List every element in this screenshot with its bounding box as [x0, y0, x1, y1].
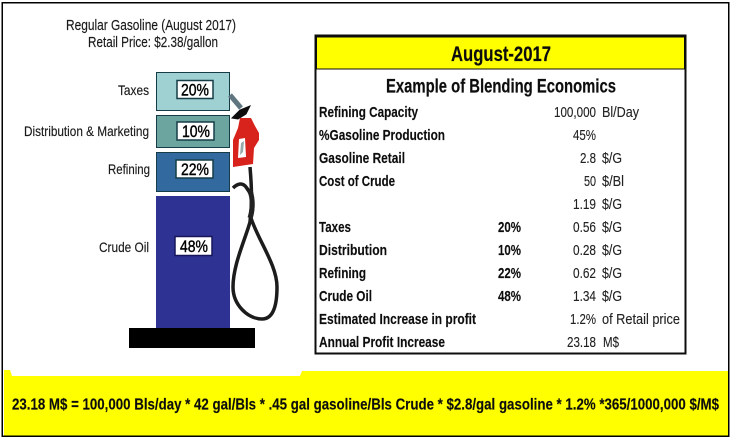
table units: M$ — [603, 334, 620, 351]
table row labels: %Gasoline Production — [319, 127, 445, 144]
segment: distribution and marketing: 10% — [182, 123, 210, 141]
segment: taxes: Taxes — [118, 82, 149, 98]
table values: 1.34 — [573, 288, 596, 305]
table row labels: Refining — [319, 265, 366, 282]
table row labels: Estimated Increase in profit — [319, 311, 476, 328]
table values — [554, 104, 596, 351]
table share percentages: 10% — [498, 242, 521, 259]
table values: 0.62 — [573, 265, 596, 282]
segment: taxes — [118, 72, 230, 110]
table units: $/G — [602, 288, 622, 305]
table header: August-2017 — [451, 43, 551, 66]
table values: 45% — [573, 127, 596, 144]
table units: $/G — [602, 150, 622, 167]
table units: $/G — [602, 242, 622, 259]
table row labels: Annual Profit Increase — [319, 334, 445, 351]
table row labels: Refining Capacity — [319, 104, 419, 121]
table share percentages: 48% — [498, 288, 521, 305]
segment: taxes: 20% — [181, 82, 209, 100]
segment: refining: Refining — [108, 161, 150, 177]
panel: blending economics table — [316, 36, 686, 354]
table units: $/G — [602, 219, 622, 236]
table values: 0.56 — [573, 219, 596, 236]
table values: 1.2% — [570, 311, 596, 328]
table values: 23.18 — [567, 334, 596, 351]
segment: distribution and marketing: Distribution & Marketing — [24, 123, 149, 139]
table units: of Retail price — [602, 311, 680, 328]
table values: 0.28 — [573, 242, 596, 259]
table values: 100,000 — [554, 104, 596, 121]
table row labels: Crude Oil — [319, 288, 372, 305]
panel: formula band — [4, 370, 728, 436]
table values: 2.8 — [580, 150, 596, 167]
chart: gasoline price breakdown pump — [24, 18, 277, 348]
table units — [602, 104, 680, 351]
table row labels: Cost of Crude — [319, 173, 395, 190]
pump base — [129, 328, 255, 348]
table row labels — [319, 104, 476, 351]
table row labels: Taxes — [319, 219, 351, 236]
segment: crude oil — [99, 196, 230, 329]
table share percentages — [498, 219, 521, 305]
chart title — [66, 18, 236, 51]
table values: 1.19 — [573, 196, 596, 213]
chart title: Retail Price: $2.38/gallon — [88, 35, 218, 51]
icon: fuel nozzle and hose — [230, 95, 277, 319]
table units: $/G — [602, 265, 622, 282]
table header — [316, 37, 684, 69]
table share percentages: 22% — [498, 265, 521, 282]
segment: refining: 22% — [181, 161, 209, 179]
table units: $/G — [602, 196, 622, 213]
chart title: Regular Gasoline (August 2017) — [66, 18, 236, 34]
table units: Bl/Day — [602, 104, 639, 121]
table values: 50 — [584, 173, 596, 190]
table heading: Example of Blending Economics — [386, 76, 616, 98]
table row labels: Distribution — [319, 242, 387, 259]
segment: crude oil: 48% — [180, 238, 208, 256]
table share percentages: 20% — [498, 219, 521, 236]
table units: $/Bl — [602, 173, 624, 190]
segment: crude oil: Crude Oil — [99, 239, 149, 255]
segment: refining — [108, 152, 230, 192]
segment: distribution and marketing — [24, 116, 230, 148]
table row labels: Gasoline Retail — [319, 150, 405, 167]
